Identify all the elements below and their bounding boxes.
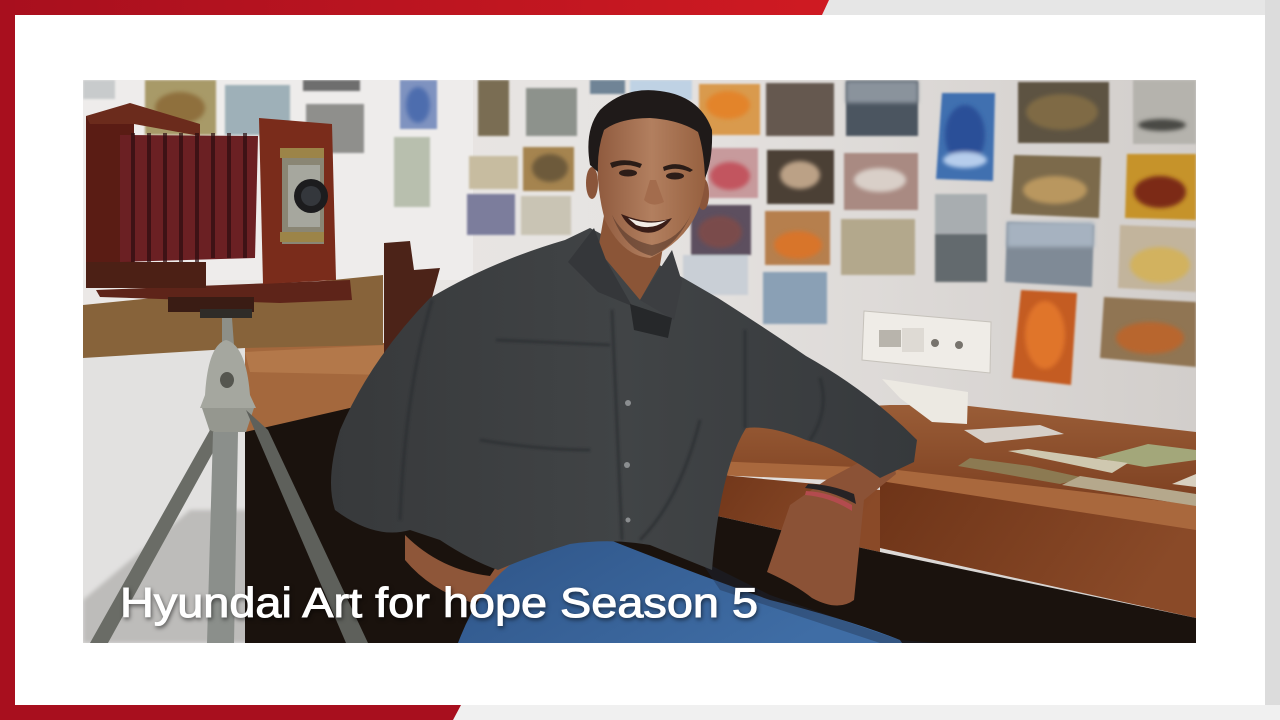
man: seated figure [331,90,936,643]
caption: Hyundai Art for hope Season 5: Hyundai Art for hope Season 5 [120,579,758,626]
shirt torso and sleeves [331,228,917,570]
large format camera [86,103,352,318]
ears [586,167,598,199]
pinned photographs on the wall [83,80,1196,385]
tripod [90,318,368,643]
collar [568,228,632,306]
wall socket panel [862,311,991,373]
right forearm and hand [767,464,896,606]
nose [644,180,664,205]
wall background [83,80,1196,643]
photo details [155,81,1190,369]
left hand on knee [405,535,510,602]
papers and postcards on the desk [882,379,1196,506]
chair back [384,241,440,353]
wooden desk [83,275,1196,643]
smile [621,214,672,233]
photo: photographer at his desk [83,80,1196,643]
shirt folds [400,300,823,540]
eyebrows and eyes [610,160,642,168]
shirt buttons [624,400,631,522]
jeans [458,539,902,643]
face [597,108,706,258]
stubble [612,212,692,256]
neck [600,216,662,300]
